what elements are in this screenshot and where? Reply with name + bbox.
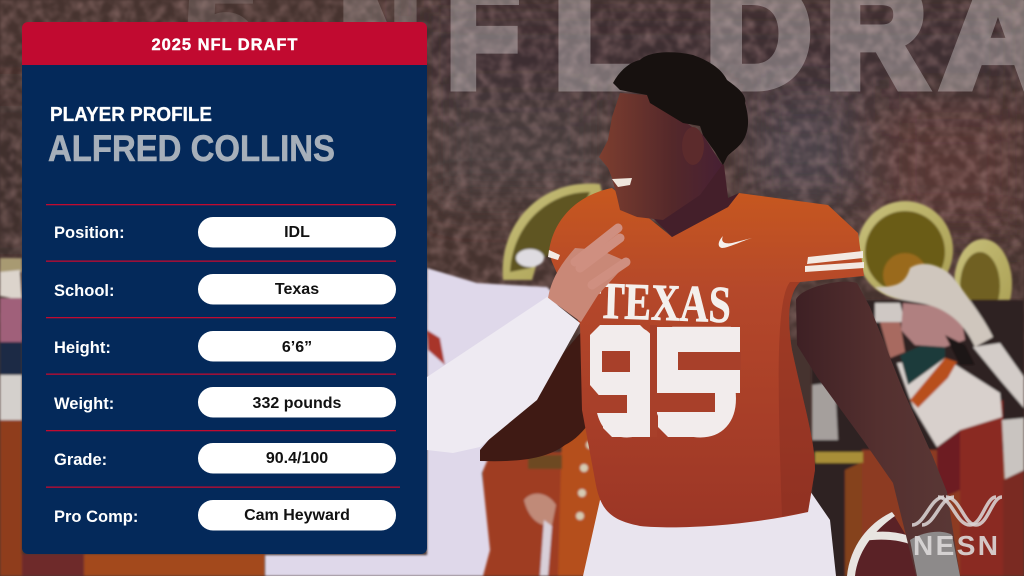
sleeve stripes — [548, 250, 864, 272]
logo: NESN — [912, 497, 1002, 561]
figure: white pants — [583, 488, 836, 576]
band members behind player — [482, 410, 606, 576]
jersey wordmark: TEXAS — [597, 273, 732, 334]
icon: nike swoosh — [719, 236, 752, 248]
figure: player's head — [599, 52, 748, 237]
left tuba — [503, 183, 604, 280]
row: position: Position: — [54, 224, 125, 242]
figure: player's hand — [548, 228, 628, 322]
figure: Texas jersey — [548, 188, 864, 527]
right tubas — [857, 201, 1012, 329]
row: pro comp — [46, 486, 400, 530]
background: left edge and lower figures — [0, 258, 265, 576]
wrist wrap — [910, 532, 960, 576]
row: pro comp: Cam Heyward — [244, 507, 350, 524]
row: grade — [46, 430, 396, 474]
row: height — [46, 317, 396, 362]
figure: player's dark arm — [480, 330, 600, 461]
row: weight: Weight: — [54, 395, 114, 413]
row: pro comp: Pro Comp: — [54, 508, 138, 526]
figure: football — [847, 512, 930, 576]
row: school: Texas — [275, 281, 319, 298]
figure: coach's sleeve — [427, 297, 580, 453]
face — [599, 93, 722, 220]
ear — [682, 127, 704, 165]
panel body — [22, 60, 427, 554]
row: grade: 90.4/100 — [266, 450, 328, 467]
teeth — [612, 178, 632, 187]
row: school — [46, 260, 396, 304]
row: position: IDL — [284, 224, 310, 241]
row: position — [46, 204, 396, 248]
row: weight — [46, 374, 396, 418]
neck — [650, 150, 739, 237]
header bar: 2025 NFL DRAFT — [152, 36, 298, 54]
row: school: School: — [54, 282, 114, 300]
band members at lower right — [812, 264, 1024, 576]
heading: player name: ALFRED COLLINS — [48, 128, 335, 169]
jersey number: 95 — [593, 297, 737, 465]
row: height: Height: — [54, 339, 111, 357]
heading: player profile: PLAYER PROFILE — [50, 104, 212, 126]
panel: player profile card — [22, 22, 427, 554]
figure: coach in white — [265, 268, 560, 576]
background: ghosted 2025 NFL DRAFT lettering — [185, 0, 1024, 118]
row: weight: 332 pounds — [253, 395, 342, 412]
row: height: 6’6” — [282, 339, 312, 356]
figure: player's right arm — [796, 282, 960, 576]
hair — [613, 52, 748, 165]
row: grade: Grade: — [54, 451, 107, 469]
header bar — [22, 22, 427, 65]
logo: NESN: NESN — [913, 530, 998, 561]
background: marching band and brass — [482, 183, 1024, 576]
